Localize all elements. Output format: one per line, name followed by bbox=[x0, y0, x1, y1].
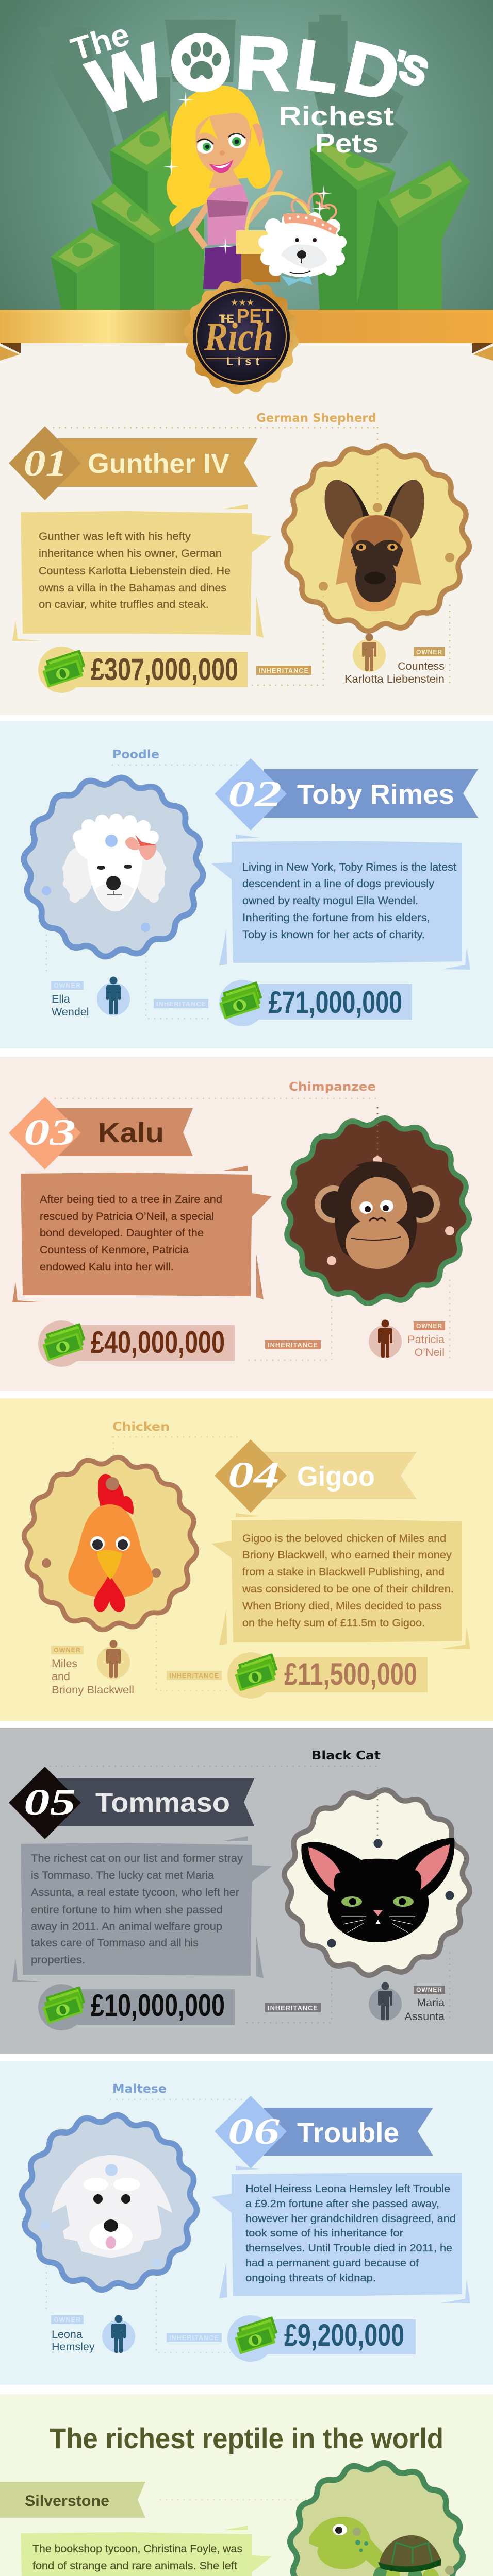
owner bbox=[51, 2315, 135, 2353]
callout text box: takes care of Tommaso and all his bbox=[31, 1937, 199, 1949]
pet portrait: Chimpanzee bbox=[284, 1108, 469, 1303]
callout text box: owns a villa in the Bahamas and dines bbox=[39, 582, 226, 594]
pet portrait: Poodle bbox=[24, 777, 203, 957]
callout text box: Gigoo is the beloved chicken of Miles and bbox=[242, 1533, 446, 1545]
ribbon heading: Gigoo bbox=[297, 1461, 375, 1492]
callout text box: Assunta, a real estate tycoon, who left her bbox=[31, 1887, 239, 1899]
callout text box: fond of strange and rare animals. She left bbox=[32, 2560, 237, 2572]
owner: Karlotta Liebenstein bbox=[344, 673, 445, 685]
pet card: Trouble bbox=[22, 2082, 470, 2362]
title bbox=[67, 16, 434, 159]
callout text box: properties. bbox=[31, 1954, 85, 1966]
ribbon heading bbox=[215, 758, 478, 831]
dotted connectors bbox=[160, 2500, 450, 2576]
owner: O’Neil bbox=[414, 1346, 445, 1359]
badge: The Pet Rich List: PET bbox=[237, 306, 273, 327]
panel: section 06 Trouble background bbox=[0, 2061, 493, 2385]
badge: The Pet Rich List: Rich bbox=[204, 314, 273, 359]
panel: hero header bbox=[0, 0, 493, 310]
heading: The richest reptile in the world bbox=[50, 2422, 443, 2454]
callout text box bbox=[211, 835, 470, 970]
callout text box: themselves. Until Trouble died in 2011, he bbox=[245, 2243, 452, 2254]
ribbon heading bbox=[9, 426, 258, 500]
white dog with tiara bbox=[258, 193, 347, 286]
pet card: Gunther IV bbox=[9, 412, 469, 693]
ribbon heading: 03 bbox=[24, 1112, 76, 1153]
ribbon heading: Kalu bbox=[98, 1117, 164, 1148]
title word: The: The bbox=[67, 16, 134, 67]
callout text box bbox=[12, 504, 272, 641]
owner bbox=[51, 1640, 134, 1696]
ribbon heading: Gunther IV bbox=[88, 448, 229, 479]
callout text box: After being tied to a tree in Zaire and bbox=[40, 1194, 222, 1206]
callout text box: ongoing threats of kidnap. bbox=[245, 2273, 376, 2284]
callout text box bbox=[12, 2526, 272, 2576]
inheritance label: INHERITANCE bbox=[156, 1000, 206, 1008]
callout text box: When Briony died, Miles decided to pass bbox=[242, 1600, 442, 1612]
owner: Ella bbox=[52, 993, 70, 1005]
ribbon heading: Toby Rimes bbox=[297, 779, 454, 810]
breed label: Chimpanzee bbox=[289, 1080, 376, 1094]
panel: section 02 Toby Rimes background bbox=[0, 721, 493, 1048]
inheritance amount: £10,000,000 bbox=[91, 1988, 225, 2023]
panel: section 03 Kalu background bbox=[0, 1057, 493, 1391]
breed label: Maltese bbox=[112, 2082, 167, 2096]
title word: WORLD'S: O bbox=[172, 22, 232, 107]
owner: Maria bbox=[417, 1996, 445, 2009]
owner: Countess bbox=[398, 660, 445, 672]
panel: section 05 Tommaso background bbox=[0, 1728, 493, 2054]
callout text box: on caviar, white truffles and steak. bbox=[39, 599, 209, 611]
breed label: Chicken bbox=[112, 1420, 170, 1434]
ribbon heading: Tommaso bbox=[95, 1787, 230, 1818]
pet card: Toby Rimes bbox=[24, 748, 478, 1026]
dotted connectors bbox=[46, 765, 242, 1019]
ribbon heading bbox=[215, 1439, 417, 1513]
pet portrait: German Shepherd bbox=[284, 428, 469, 631]
breed label: Poodle bbox=[112, 748, 159, 761]
title word: WORLD'S: L bbox=[291, 25, 344, 108]
inheritance label: INHERITANCE bbox=[268, 1341, 318, 1349]
ribbon heading: 02 bbox=[228, 773, 282, 815]
inheritance label: INHERITANCE bbox=[259, 667, 309, 674]
callout text box: Countess Karlotta Liebenstein died. He bbox=[39, 565, 231, 577]
pet card: Kalu bbox=[9, 1080, 469, 1367]
callout text box bbox=[211, 2166, 470, 2303]
title word: WORLD'S: ' bbox=[390, 43, 409, 86]
callout text box: Countess of Kenmore, Patricia bbox=[40, 1244, 189, 1256]
callout text box: endowed Kalu into her will. bbox=[40, 1261, 174, 1273]
owner: OWNER bbox=[54, 1646, 81, 1654]
callout text box: Hotel Heiress Leona Hemsley left Trouble bbox=[245, 2183, 450, 2195]
ribbon heading bbox=[9, 1097, 193, 1170]
callout text box: descendent in a line of dogs previously bbox=[242, 878, 435, 890]
inheritance amount bbox=[227, 1652, 428, 1699]
callout text box: had a permanent guard because of bbox=[245, 2258, 419, 2269]
handbag bbox=[236, 193, 309, 282]
title word: WORLD'S: R bbox=[234, 20, 292, 106]
money stacks bbox=[51, 110, 470, 310]
inheritance amount: £71,000,000 bbox=[269, 985, 402, 1020]
dotted connectors bbox=[55, 1098, 450, 1360]
badge: The Pet Rich List: THE bbox=[219, 312, 234, 325]
callout text box: Gunther was left with his hefty bbox=[39, 531, 191, 543]
title word: WORLD'S: D bbox=[338, 26, 407, 116]
badge: The Pet Rich List: List bbox=[226, 355, 260, 368]
breed label: German Shepherd bbox=[256, 412, 376, 425]
callout text box: Briony Blackwell, who earned their money bbox=[242, 1549, 452, 1561]
inheritance label: INHERITANCE bbox=[268, 2004, 318, 2012]
callout text box bbox=[12, 1166, 272, 1302]
owner: Patricia bbox=[407, 1333, 445, 1346]
owner: Briony Blackwell bbox=[52, 1684, 134, 1696]
callout text box: Inheriting the fortune from his elders, bbox=[242, 912, 430, 924]
callout text box: away in 2011. An animal welfare group bbox=[31, 1921, 222, 1933]
inheritance amount bbox=[38, 1984, 235, 2030]
pet card: Silverstone bbox=[0, 2422, 463, 2576]
ribbon heading bbox=[9, 1767, 254, 1839]
callout text box: The richest cat on our list and former stray bbox=[31, 1853, 243, 1865]
badge: The Pet Rich List bbox=[184, 279, 299, 394]
inheritance amount: £40,000,000 bbox=[91, 1325, 225, 1360]
owner: OWNER bbox=[416, 648, 442, 656]
owner: and bbox=[52, 1670, 70, 1683]
owner bbox=[51, 977, 130, 1018]
woman with blonde hair bbox=[167, 86, 280, 289]
pet card: Tommaso bbox=[9, 1749, 470, 2030]
callout text box: owned by realty mogul Ella Wendel. bbox=[242, 895, 418, 907]
owner: Hemsley bbox=[52, 2341, 95, 2353]
callout text box: Living in New York, Toby Rimes is the latest bbox=[242, 861, 456, 873]
callout text box: took some of his inheritance for bbox=[245, 2228, 403, 2239]
title word: WORLD'S: S bbox=[394, 45, 434, 95]
title word: WORLD'S: W bbox=[79, 27, 174, 130]
owner: Miles bbox=[52, 1657, 77, 1670]
gold ribbon band bbox=[0, 310, 493, 361]
owner bbox=[344, 634, 445, 685]
dotted connectors bbox=[46, 2099, 242, 2353]
inheritance amount: £307,000,000 bbox=[91, 652, 238, 687]
ribbon heading: 06 bbox=[228, 2111, 280, 2152]
inheritance amount bbox=[38, 647, 248, 693]
dotted connectors bbox=[54, 428, 450, 685]
pet card: Gigoo bbox=[24, 1420, 470, 1699]
inheritance amount bbox=[38, 1320, 235, 1367]
breed label: Black Cat bbox=[311, 1749, 381, 1762]
pet portrait: Chicken bbox=[24, 1458, 196, 1630]
callout text box: inheritance when his owner, German bbox=[39, 548, 222, 560]
owner: OWNER bbox=[54, 981, 81, 989]
owner: Leona bbox=[52, 2328, 83, 2341]
callout text box: The bookshop tycoon, Christina Foyle, was bbox=[32, 2543, 242, 2555]
dotted connectors bbox=[50, 1766, 450, 2023]
callout text box: on the hefty sum of £11.5m to Gigoo. bbox=[242, 1617, 425, 1629]
callout text box bbox=[12, 1836, 272, 1982]
ribbon heading: 04 bbox=[228, 1454, 280, 1496]
title line: Pets: Pets bbox=[315, 129, 379, 159]
owner: Assunta bbox=[404, 2010, 445, 2023]
panel: richest reptile background bbox=[0, 2394, 493, 2576]
paw in the O bbox=[171, 33, 230, 92]
panel: section 01 Gunther IV background bbox=[0, 343, 493, 715]
dotted connectors bbox=[46, 1437, 237, 1690]
ribbon heading: 05 bbox=[24, 1782, 76, 1823]
pet portrait: Maltese bbox=[22, 2115, 196, 2290]
ribbon heading: Silverstone bbox=[25, 2493, 109, 2510]
ribbon heading bbox=[215, 2096, 433, 2168]
owner bbox=[369, 1982, 445, 2023]
owner: OWNER bbox=[54, 2316, 81, 2324]
callout text box: a £9.2m fortune after she passed away, bbox=[245, 2198, 439, 2210]
inheritance label: INHERITANCE bbox=[169, 1672, 219, 1680]
callout text box: from a stake in Blackwell Publishing, and bbox=[242, 1566, 445, 1578]
ribbon heading: 01 bbox=[24, 443, 68, 484]
skyline shadows behind title bbox=[38, 15, 409, 191]
ribbon heading bbox=[0, 2482, 145, 2518]
title line: Richest: Richest bbox=[278, 101, 394, 131]
callout text box: however her grandchildren disagreed, and bbox=[245, 2213, 456, 2225]
callout text box: is Tommaso. The lucky cat met Maria bbox=[31, 1870, 214, 1882]
pet portrait: Tortoise bbox=[290, 2463, 463, 2576]
owner: OWNER bbox=[416, 1986, 442, 1994]
badge: The Pet Rich List: ★★★ bbox=[231, 298, 254, 308]
ribbon heading: Trouble bbox=[297, 2117, 399, 2148]
inheritance amount: £11,500,000 bbox=[284, 1657, 417, 1691]
owner bbox=[369, 1320, 445, 1359]
inheritance amount bbox=[217, 980, 412, 1026]
inheritance amount: £9,200,000 bbox=[284, 2318, 404, 2352]
panel: section 04 Gigoo background bbox=[0, 1398, 493, 1721]
callout text box: entire fortune to him when she passed bbox=[31, 1904, 223, 1916]
owner: Wendel bbox=[52, 1006, 89, 1018]
callout text box: rescued by Patricia O’Neil, a special bbox=[40, 1211, 214, 1223]
sparkles bbox=[163, 92, 332, 255]
callout text box bbox=[211, 1513, 470, 1649]
callout text box: was considered to be one of their children. bbox=[242, 1583, 454, 1595]
callout text box: Toby is known for her acts of charity. bbox=[242, 929, 425, 941]
inheritance label: INHERITANCE bbox=[169, 2334, 219, 2342]
pet portrait: Black Cat bbox=[284, 1788, 470, 1975]
owner: OWNER bbox=[416, 1322, 442, 1330]
inheritance amount bbox=[227, 2315, 416, 2362]
callout text box: bond developed. Daughter of the bbox=[40, 1227, 204, 1239]
